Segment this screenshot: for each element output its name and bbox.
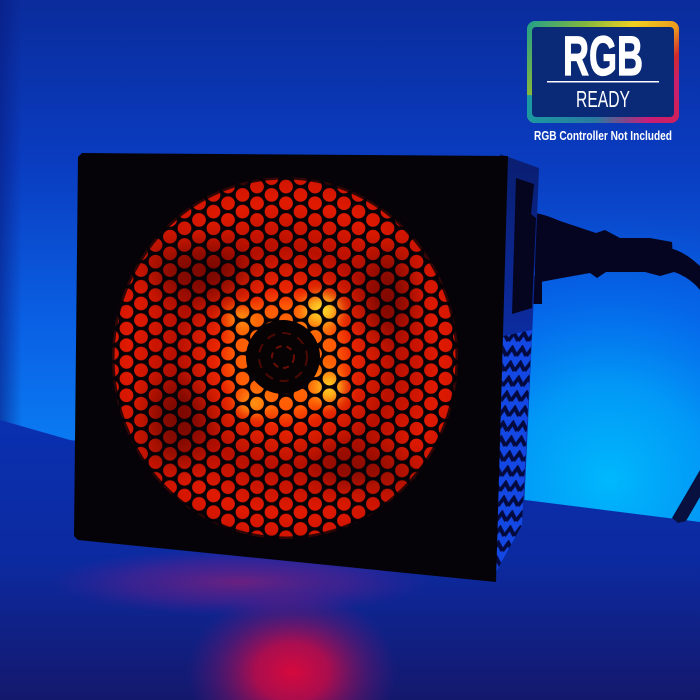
fan hub xyxy=(246,320,320,394)
zigzag vents xyxy=(496,330,532,572)
badge frame xyxy=(527,21,679,123)
power cable xyxy=(526,213,700,304)
socket xyxy=(512,178,536,314)
power supply box xyxy=(74,153,539,582)
red reflection on table xyxy=(50,548,430,700)
stand leg xyxy=(672,470,700,523)
rim shadow xyxy=(113,178,457,538)
dim blade shadows xyxy=(145,242,415,488)
fan glow xyxy=(112,177,458,539)
side panel xyxy=(493,154,539,582)
fan with grille xyxy=(112,177,458,539)
badge title: RGB xyxy=(563,24,643,87)
badge subtitle: READY xyxy=(576,86,630,112)
badge: RGB ready xyxy=(527,21,679,123)
hot spots xyxy=(226,295,342,413)
background wall xyxy=(0,0,700,540)
front face xyxy=(74,153,508,582)
hole grille xyxy=(112,177,458,539)
table surface xyxy=(0,420,700,700)
